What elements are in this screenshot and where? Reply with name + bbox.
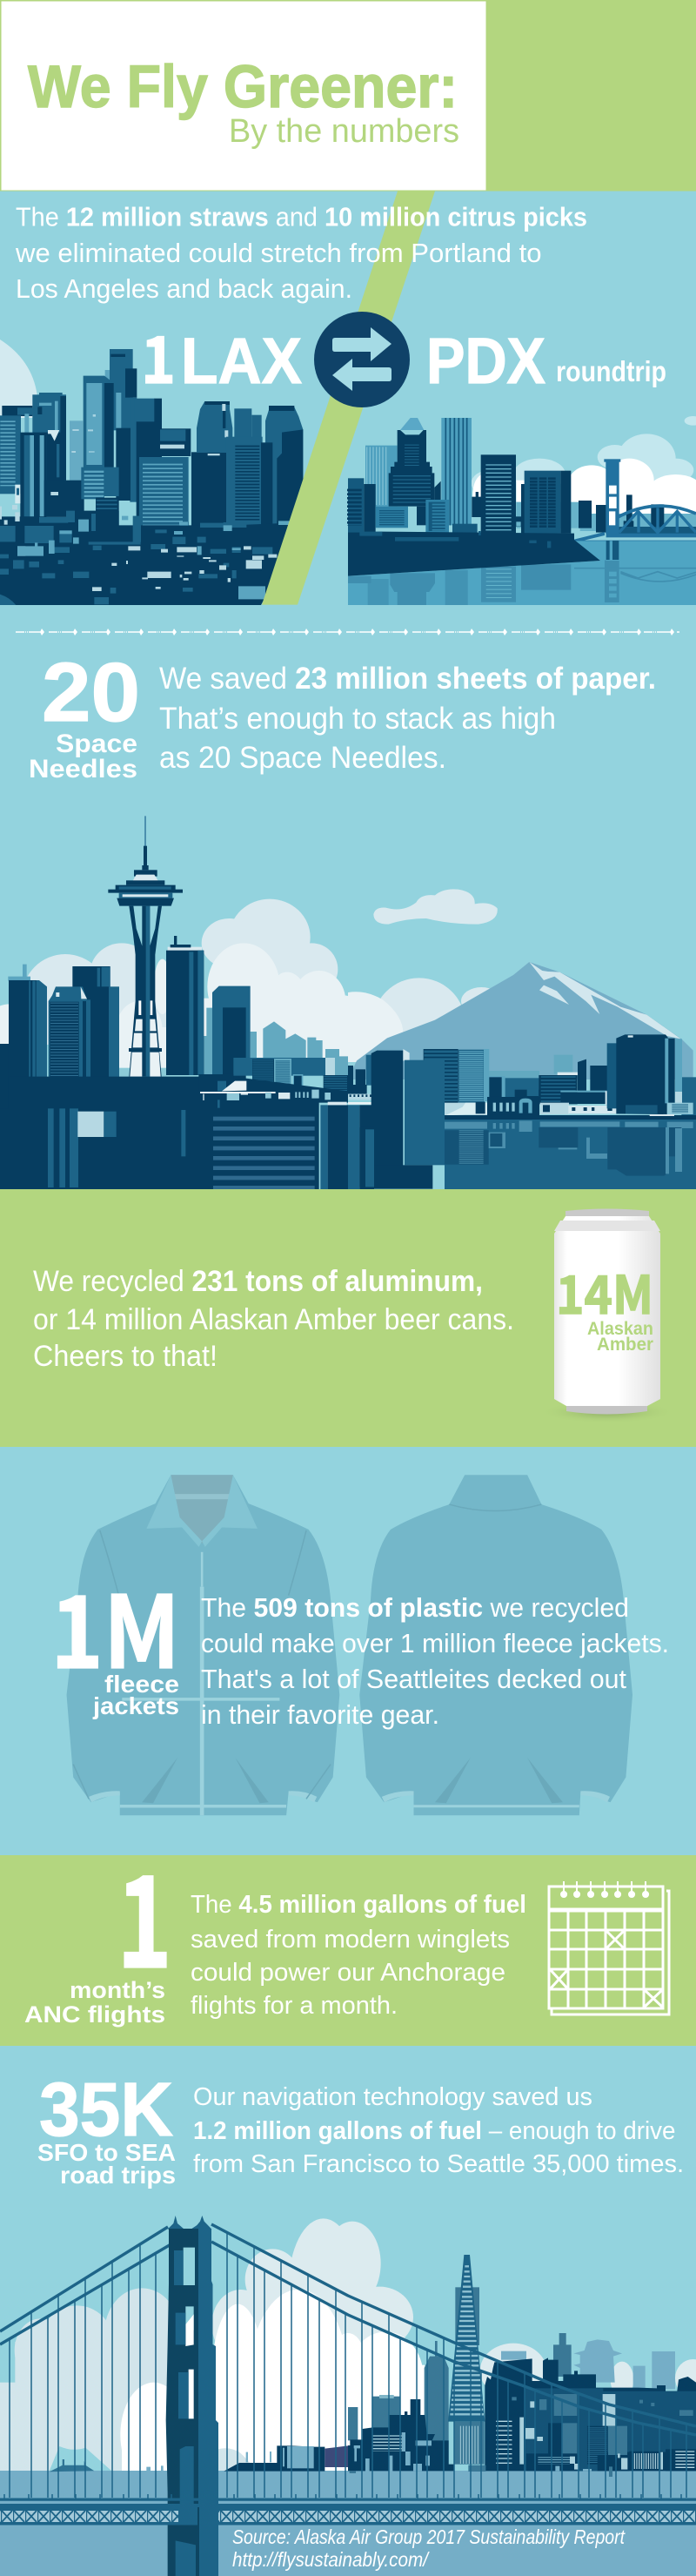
hanger cables: [10, 2232, 686, 2498]
green diagonal stripe: [262, 192, 435, 605]
Los Angeles ground: [0, 511, 304, 605]
text: winglets: The 4.5 million gallons of fuel: [191, 1891, 526, 1919]
stat: 1 LAX PDX roundtrip: 1: [141, 309, 176, 402]
left towers: [0, 965, 119, 1189]
Los Angeles skyline: [0, 340, 304, 605]
stat: 1 LAX PDX roundtrip: [141, 309, 666, 407]
text: navigation fuel: from San Francisco to Seattle 35,000 times.: [193, 2150, 684, 2178]
stat: 1M fleece jackets: 1M: [50, 1553, 180, 1698]
text: aluminum: [33, 1265, 514, 1373]
mountain: [348, 962, 693, 1079]
source note: [232, 2526, 626, 2571]
Seattle east: clouds, mountain, waterfront: [348, 889, 696, 1189]
illustration: fleece jackets: [67, 1475, 632, 1815]
icon: calendar: [549, 1881, 669, 2014]
text: navigation fuel: 1.2 million gallons of fuel – enough to drive: [193, 2117, 675, 2145]
text: navigation fuel: [193, 2083, 684, 2178]
background buildings: [204, 1008, 348, 1075]
stat: 1M fleece jackets: fleece: [104, 1671, 179, 1698]
Alcatraz island: [50, 2459, 94, 2472]
Seattle reflections: [359, 1120, 693, 1187]
text: aluminum: Cheers to that!: [33, 1340, 218, 1373]
Portland tower block and towers: [365, 446, 398, 507]
text: aluminum: We recycled 231 tons of aluminum,: [33, 1265, 483, 1298]
text: plastic recycled: The 509 tons of plastic we recycled: [201, 1592, 629, 1623]
stat: 1 LAX PDX roundtrip: roundtrip: [556, 355, 666, 387]
text: paper saved: That’s enough to stack as high: [159, 702, 556, 736]
intro text: we eliminated could stretch from Portland to: [15, 238, 541, 268]
tower center line: [197, 2507, 199, 2576]
intro text: The 12 million straws and 10 million citrus picks: [16, 201, 587, 232]
bay water: [0, 2471, 696, 2576]
panel: aluminum: [0, 1189, 696, 1447]
source note: http://flysustainably.com/: [232, 2548, 430, 2571]
illustration: San Francisco and Golden Gate Bridge: [0, 2216, 696, 2576]
icon: beer can: [539, 1208, 675, 1423]
cloud behind Los Angeles: [0, 340, 37, 418]
small cloud: [373, 889, 498, 925]
west shore buildings: [146, 2445, 348, 2472]
text: navigation fuel: Our navigation technology saved us: [193, 2083, 592, 2111]
title: We Fly Greener:: [28, 53, 458, 120]
text: plastic recycled: [201, 1592, 669, 1730]
icon: exchange arrows: [314, 312, 410, 407]
divider: row of planes: [16, 629, 679, 636]
text: winglets: could power our Anchorage: [191, 1959, 505, 1987]
text: winglets: flights for a month.: [191, 1992, 398, 2020]
west clouds and bay: [0, 2218, 358, 2487]
mid city: [233, 1058, 348, 1092]
stat: 1 month's ANC flights: [24, 1821, 172, 2028]
header panel: [0, 0, 696, 192]
stat: 35K road trips: SFO to SEA: [37, 2139, 176, 2166]
icon: beer can: Amber: [597, 1335, 653, 1355]
stat: 35K road trips: 35K: [39, 2068, 173, 2152]
downtown mass: [348, 2357, 696, 2477]
stat: 1 LAX PDX roundtrip: LAX: [181, 325, 302, 397]
can label: 14M: [556, 1254, 653, 1329]
bridge deck and truss: [0, 2494, 696, 2525]
intro text: Los Angeles and back again.: [16, 273, 352, 304]
stat: 1 month's ANC flights: ANC flights: [24, 2001, 165, 2028]
stat: 35K road trips: [37, 2068, 176, 2189]
center towers: [166, 936, 251, 1080]
stat: 20 Space Needles: 20: [42, 646, 140, 739]
text: paper saved: as 20 Space Needles.: [159, 741, 446, 775]
text: paper saved: [159, 662, 656, 775]
text: plastic recycled: That's a lot of Seattleites decked out: [201, 1664, 626, 1694]
stat: 1 month's ANC flights: 1: [117, 1821, 172, 2005]
jacket front: [67, 1475, 339, 1815]
Seattle west: clouds, Space Needle, downtown: [0, 816, 348, 1190]
stat: 1 LAX PDX roundtrip: PDX: [426, 325, 545, 397]
source note: Source: Alaska Air Group 2017 Sustainability Report: [232, 2526, 626, 2548]
illustration: Los Angeles and Portland skylines: [0, 192, 696, 605]
text: winglets: [191, 1891, 526, 2020]
illustration: Seattle skyline: [0, 816, 696, 1190]
stat: 20 Space Needles: Needles: [29, 755, 137, 784]
stat: 20 Space Needles: Space: [56, 730, 137, 758]
bridge tower: light column: [198, 2228, 218, 2576]
text: plastic recycled: could make over 1 million fleece jackets.: [201, 1628, 669, 1658]
downtown base: [0, 1074, 348, 1190]
stat: 1M fleece jackets: jackets: [92, 1692, 179, 1719]
subtitle: By the numbers: [229, 113, 459, 150]
main cables: [0, 2224, 696, 2435]
bridge: [572, 459, 696, 541]
stat: 1 month's ANC flights: month’s: [70, 1977, 165, 2003]
San Francisco city: [348, 2255, 696, 2477]
stat: 35K road trips: road trips: [60, 2162, 176, 2189]
icon: beer can: Alaskan: [587, 1319, 653, 1339]
Transamerica Pyramid: [448, 2255, 485, 2465]
clouds: [0, 899, 348, 1077]
Portland island: [348, 532, 600, 576]
east clouds: [324, 2222, 696, 2472]
Portland skyline: [348, 416, 696, 605]
text: winglets: saved from modern winglets: [191, 1926, 510, 1954]
Space Needle: [108, 816, 183, 1080]
stat: 20 Space Needles: [29, 646, 140, 784]
Portland reflections: [348, 560, 619, 605]
text: aluminum: or 14 million Alaskan Amber beer cans.: [33, 1303, 514, 1336]
panel: winglet fuel: [0, 1821, 696, 2046]
jacket back: [359, 1475, 632, 1815]
text: plastic recycled: in their favorite gear.: [201, 1699, 439, 1730]
bridge tower: dark column: [166, 2216, 211, 2576]
text: paper saved: We saved 23 million sheets of paper.: [159, 662, 656, 696]
intro text: [15, 201, 587, 304]
